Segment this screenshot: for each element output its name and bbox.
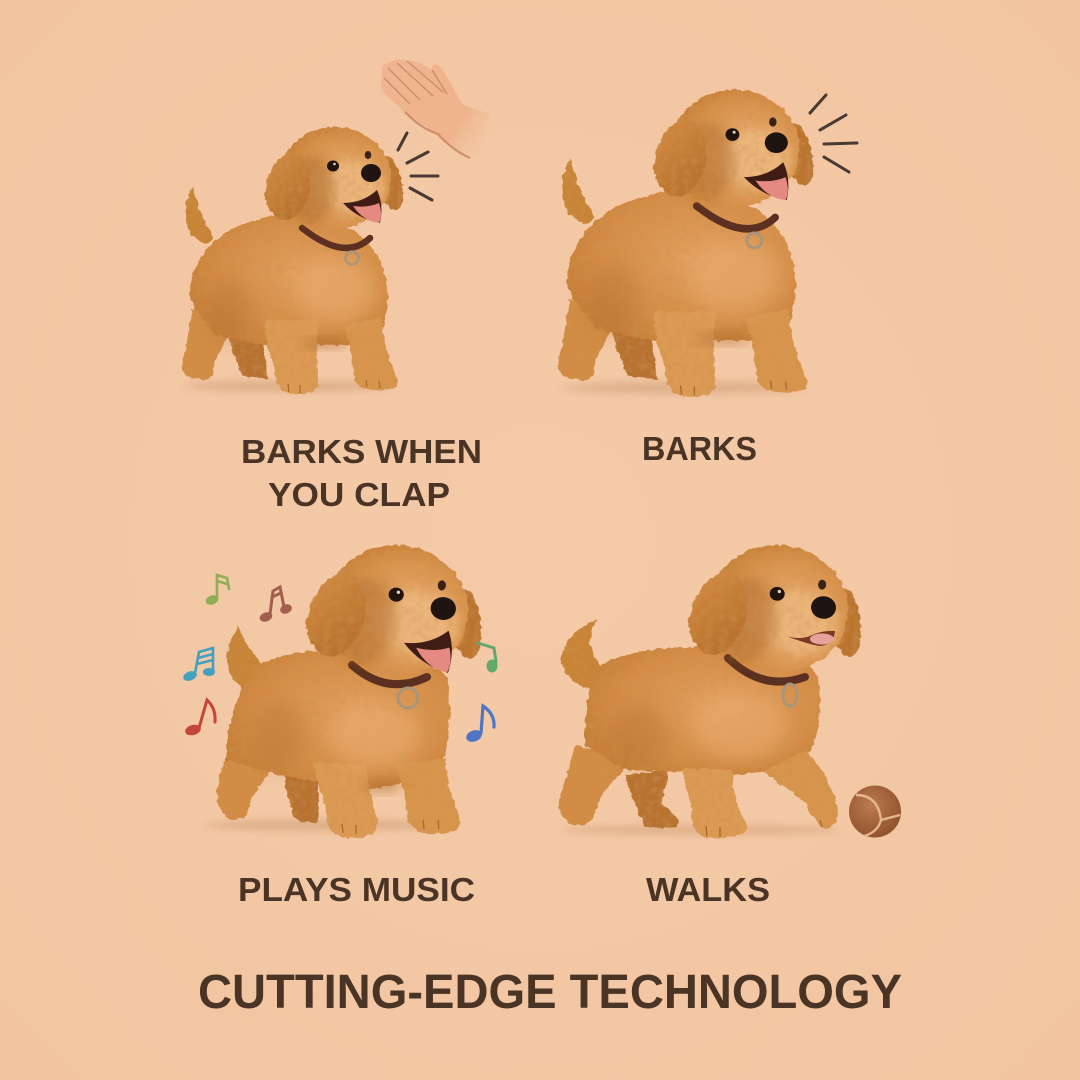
icon: ball <box>849 786 901 838</box>
icon: bark lines <box>810 95 857 172</box>
icon: clapping hands <box>381 60 490 158</box>
note: red <box>184 700 215 737</box>
label: barks when you clap <box>241 433 482 513</box>
puppy walking <box>559 536 875 838</box>
puppy with music <box>205 536 496 838</box>
note: brown <box>258 587 293 623</box>
label: plays music: PLAYS MUSIC <box>238 871 475 908</box>
label: barks when you clap: YOU CLAP <box>268 476 450 513</box>
icon: bark lines <box>398 133 438 200</box>
label: barks when you clap: BARKS WHEN <box>241 433 482 470</box>
note: teal <box>478 643 498 672</box>
panel: walks <box>559 536 901 908</box>
icon: music notes <box>182 575 498 744</box>
panel: plays music <box>182 536 498 908</box>
title: CUTTING-EDGE TECHNOLOGY <box>198 966 902 1019</box>
label: barks: BARKS <box>642 430 757 467</box>
panel: barks <box>558 90 857 467</box>
puppy barking at clap <box>182 127 408 394</box>
puppy barking <box>558 90 819 397</box>
note: green <box>204 575 229 606</box>
panel: barks when you clap <box>182 60 490 513</box>
note: blue beam <box>182 648 215 683</box>
label: walks: WALKS <box>646 871 770 908</box>
note: blue <box>465 706 494 744</box>
